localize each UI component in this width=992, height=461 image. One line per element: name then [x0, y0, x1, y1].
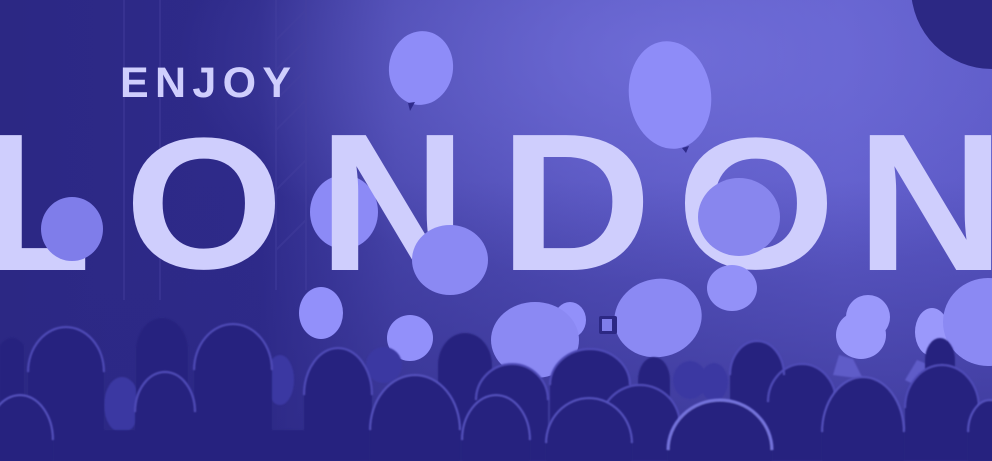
title: LONDON: N	[318, 93, 467, 312]
crowd silhouettes: middle row	[0, 318, 992, 461]
title: LONDON: D	[499, 93, 652, 312]
balloon behind lettering	[310, 175, 378, 249]
title: LONDON	[0, 93, 992, 312]
crowd silhouettes: back row	[104, 347, 927, 433]
balloon: top centre	[622, 36, 718, 154]
crowd silhouettes: front row	[0, 375, 992, 461]
corner circle	[911, 0, 992, 69]
balloon: top left	[384, 27, 458, 111]
title: LONDON: O	[125, 99, 284, 308]
stage truss	[124, 0, 306, 300]
heading: ENJOY: ENJOY	[120, 59, 291, 107]
balloons in front of lettering	[41, 178, 992, 378]
title: LONDON: O	[677, 99, 836, 308]
